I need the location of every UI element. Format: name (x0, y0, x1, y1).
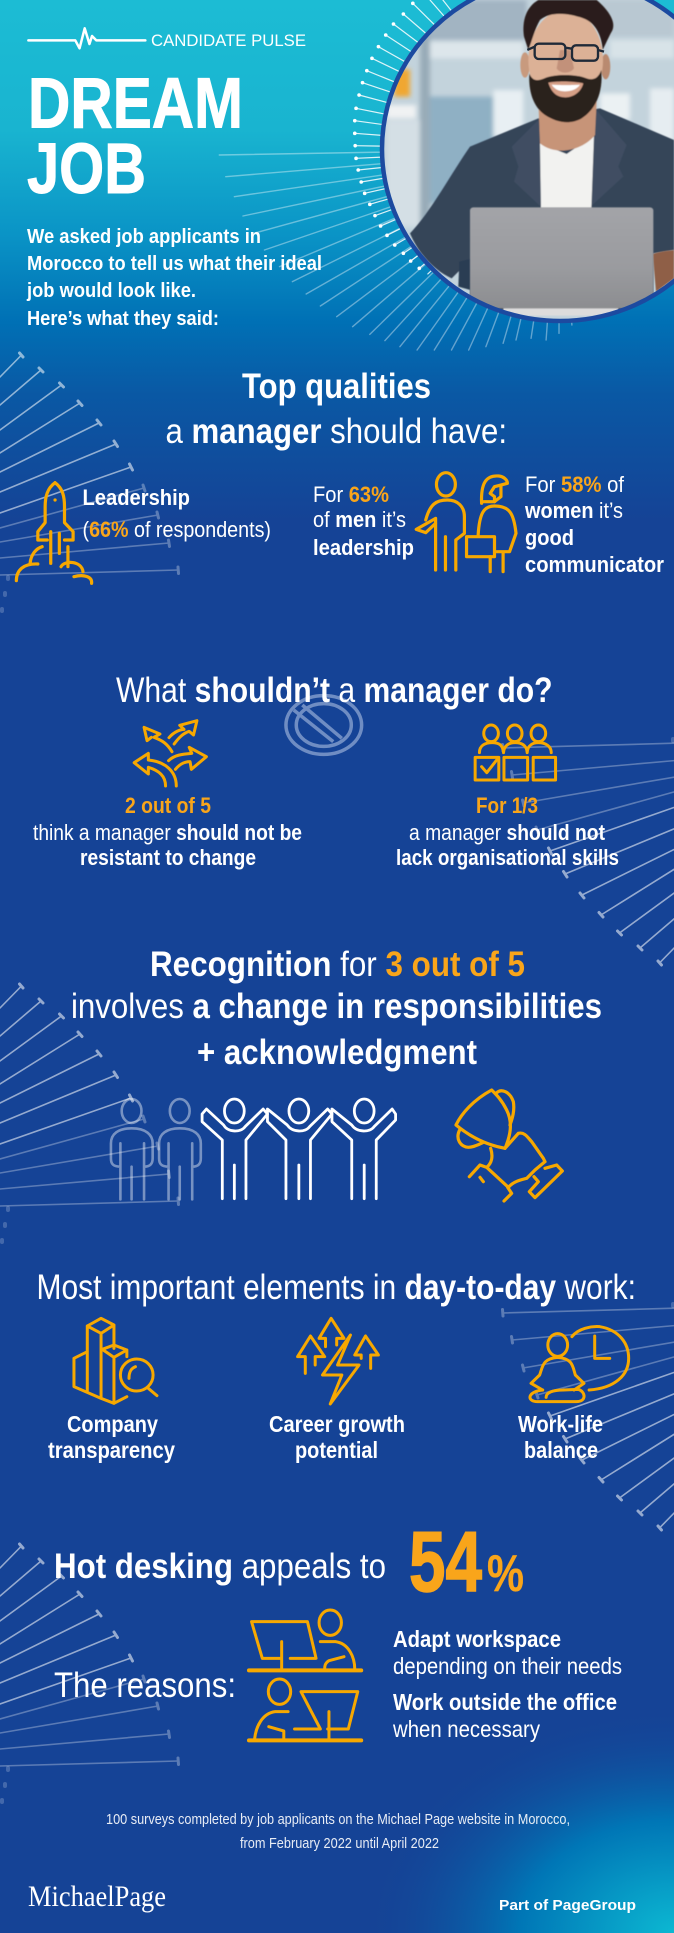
intro paragraph: job would look like. (26, 280, 196, 302)
icon: lightning and arrows (298, 1318, 378, 1404)
text: women 58%: For 58% of (525, 472, 625, 497)
text: work-life balance: balance (524, 1437, 598, 1463)
panel: hot desking (54, 1515, 622, 1742)
icon: diverging arrows (134, 721, 206, 786)
jacket (410, 108, 674, 310)
heading: involves a change in responsibilities (71, 987, 602, 1026)
footer: Part of PageGroup: Part of PageGroup (499, 1897, 636, 1914)
text: women 58%: good (525, 525, 574, 550)
heading: Top qualities (242, 367, 431, 406)
title (27, 64, 243, 209)
intro paragraph (26, 226, 322, 330)
portrait photo of smiling man with laptop (370, 0, 674, 330)
text: reasons list: depending on their needs (393, 1653, 622, 1679)
heading: What shouldn’t a manager do? (116, 671, 552, 710)
header rays around portrait (219, 0, 658, 350)
footnote: 100 surveys completed by job applicants on the Michael Page website in Morocco, (106, 1811, 570, 1828)
text: men 63%: leadership (313, 535, 414, 560)
heading (166, 367, 507, 451)
heading (71, 945, 602, 1072)
text: women 58%: women it’s (524, 498, 623, 523)
text: leadership 66%: (66% of respondents) (82, 517, 271, 542)
text: 2 out of 5: think a manager should not be (33, 820, 302, 845)
text: men 63%: of men it’s (313, 507, 406, 532)
heading: Most important elements in day-to-day work: (36, 1268, 636, 1307)
text: reasons list (392, 1626, 622, 1742)
text: reasons list: Work outside the office (393, 1689, 617, 1715)
glasses (527, 44, 604, 61)
text: reasons list: Adapt workspace (393, 1626, 561, 1652)
icon: rocket (16, 483, 92, 583)
icon: team and checklist (475, 725, 556, 780)
icon: people at desks (249, 1610, 361, 1740)
text: company transparency (48, 1411, 175, 1463)
text: for 1/3: lack organisational skills (396, 845, 619, 870)
text: 2 out of 5: 2 out of 5 (125, 793, 211, 818)
text: leadership 66% (82, 485, 271, 542)
title: DREAM (28, 64, 243, 144)
icon: man and woman (416, 473, 516, 572)
icon: faint prohibition sign (286, 696, 362, 754)
panel: recognition (71, 945, 602, 1201)
panel: what a manager should not do (33, 671, 619, 870)
text: reasons list: when necessary (392, 1716, 540, 1742)
text: career growth potential: potential (295, 1437, 378, 1463)
intro paragraph: Morocco to tell us what their ideal (27, 253, 322, 275)
text: company transparency: transparency (48, 1437, 175, 1463)
heading: Recognition for 3 out of 5 (150, 945, 525, 984)
kicker: Candidate Pulse: CANDIDATE PULSE (151, 31, 306, 50)
text: leadership 66%: Leadership (82, 485, 190, 510)
panel: day-to-day work (36, 1268, 636, 1463)
icon: meditation and clock (530, 1327, 629, 1402)
text: career growth potential (269, 1411, 405, 1463)
text: 2 out of 5 (33, 793, 302, 870)
big number: 54%: % (487, 1545, 524, 1603)
text: women 58%: communicator (525, 552, 664, 577)
footnote: from February 2022 until April 2022 (240, 1835, 439, 1852)
text: company transparency: Company (67, 1411, 158, 1437)
portrait ring (382, 0, 674, 321)
text: for 1/3 (396, 793, 619, 870)
intro paragraph: We asked job applicants in (27, 226, 261, 248)
header block (26, 28, 322, 330)
text: work-life balance (518, 1411, 603, 1463)
big number: 54%: 54 (409, 1515, 482, 1610)
text: for 1/3: a manager should not (409, 820, 606, 845)
logo: Michael Page: MichaelPage (28, 1880, 166, 1913)
text: work-life balance: Work-life (518, 1411, 603, 1437)
heading: a manager should have: (166, 412, 507, 451)
text: for 1/3: For 1/3 (476, 793, 538, 818)
t-shirt (540, 135, 594, 208)
text: women 58% (524, 472, 664, 577)
icon: buildings and magnifier (74, 1318, 157, 1403)
icon: three people raising arms (202, 1099, 396, 1199)
icon: two faint standing people (111, 1099, 201, 1199)
intro paragraph: Here’s what they said: (27, 308, 219, 330)
label: the reasons: The reasons: (54, 1666, 236, 1705)
hands and laptop (653, 250, 674, 292)
text: 2 out of 5: resistant to change (80, 845, 256, 870)
icon: knocked-over trophy (456, 1090, 562, 1201)
text: men 63% (313, 482, 414, 560)
pulse line icon (28, 28, 145, 48)
heading: Hot desking appeals to (54, 1547, 386, 1586)
title: JOB (27, 130, 146, 209)
text: men 63%: For 63% (313, 482, 389, 507)
text: career growth potential: Career growth (269, 1411, 405, 1437)
panel: top qualities of a manager (16, 367, 664, 583)
head (520, 52, 530, 78)
heading: + acknowledgment (197, 1033, 477, 1072)
footnote (106, 1811, 570, 1852)
neck (538, 100, 597, 151)
